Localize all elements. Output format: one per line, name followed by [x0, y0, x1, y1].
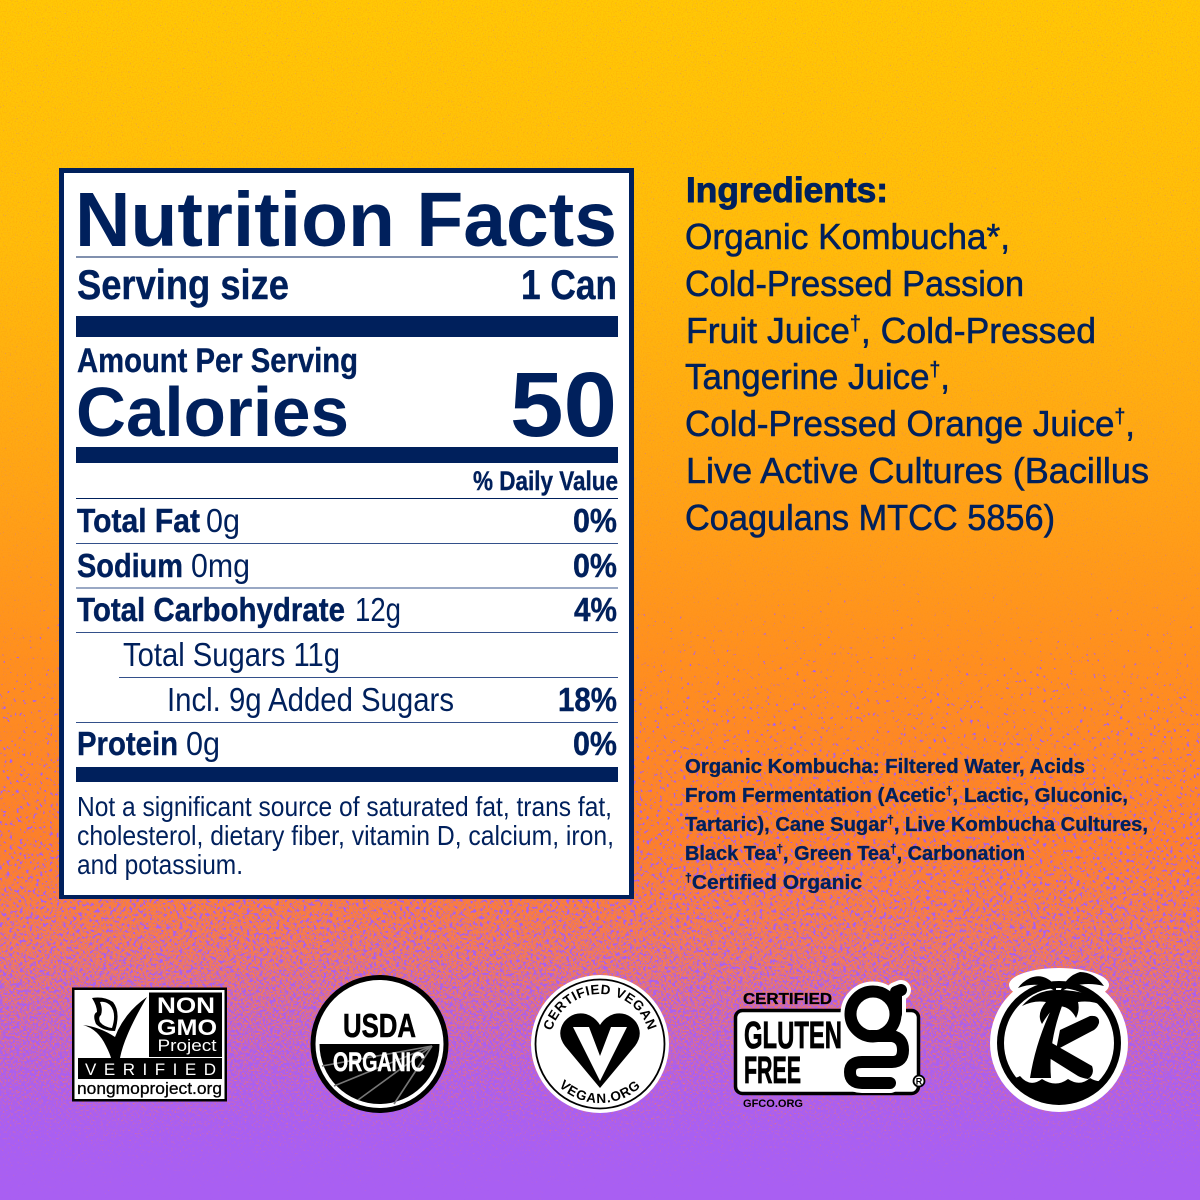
- icon: Certified Vegan: CERTIFIED VEGAN: [544, 984, 657, 1030]
- calories value: 50: [510, 354, 617, 456]
- row: total sugars: Total Sugars 11g: [123, 636, 340, 673]
- icon: Non GMO Project Verified: NON: [157, 993, 215, 1018]
- kombucha sub-ingredients: †: [685, 871, 692, 885]
- icon: Non GMO Project Verified: [72, 988, 227, 1102]
- kombucha sub-ingredients: [685, 755, 1148, 894]
- row: protein: [77, 725, 617, 762]
- row: total fat: 0%: [573, 502, 617, 539]
- row: total fat: 0g: [206, 502, 240, 539]
- ingredients list: Cold-Pressed Passion: [685, 263, 1024, 304]
- kombucha sub-ingredients: , Carbonation: [897, 842, 1025, 865]
- icon: Certified Gluten Free: GFCO.ORG: [743, 1098, 803, 1110]
- ingredients list: Live Active Cultures (Bacillus: [686, 450, 1149, 491]
- amount per serving: Amount Per Serving: [77, 342, 358, 380]
- ingredients list: Cold-Pressed Orange Juice: [685, 403, 1127, 444]
- icon: USDA Organic: [310, 975, 448, 1113]
- heart with V: [560, 1013, 640, 1088]
- row: sodium: Sodium: [77, 547, 183, 584]
- icon: Certified Gluten Free: CERTIFIED: [743, 991, 832, 1008]
- ingredients list: Fruit Juice: [686, 310, 852, 351]
- icon: USDA Organic: ORGANIC: [333, 1047, 425, 1077]
- panel: nutrition facts: [59, 168, 634, 899]
- kombucha sub-ingredients: †: [777, 842, 783, 856]
- kombucha sub-ingredients: Certified Organic: [692, 871, 862, 894]
- kombucha sub-ingredients: From Fermentation (Acetic: [685, 784, 946, 807]
- kombucha sub-ingredients: †: [946, 784, 953, 798]
- icon: Certified Gluten Free: FREE: [744, 1050, 801, 1092]
- icon: Non GMO Project Verified: GMO: [157, 1015, 217, 1040]
- ingredients list: Coagulans MTCC 5856): [685, 497, 1055, 538]
- kombucha sub-ingredients: Organic Kombucha: Filtered Water, Acids: [685, 755, 1085, 778]
- ingredients heading: Ingredients:: [686, 171, 888, 210]
- footnote: Not a significant source of saturated fat, trans fat,: [77, 791, 612, 822]
- kombucha sub-ingredients: , Live Kombucha Cultures,: [894, 813, 1148, 836]
- g mark: [850, 990, 903, 1083]
- icon: palm tree K brand logo: [990, 968, 1128, 1112]
- ingredients list: Organic Kombucha*,: [685, 216, 1010, 257]
- icon: Non GMO Project Verified: nongmoproject.org: [77, 1080, 222, 1098]
- ingredients list: †: [1114, 406, 1125, 428]
- icon: Non GMO Project Verified: VERIFIED: [85, 1060, 216, 1079]
- ingredients list: †: [850, 313, 861, 335]
- row: total carbohydrate: 4%: [574, 591, 617, 628]
- icon: Certified Gluten Free: GLUTEN: [744, 1015, 842, 1057]
- row: sodium: 0mg: [191, 547, 250, 584]
- furrow lines: [322, 1046, 432, 1104]
- row: total fat: Total Fat: [77, 502, 200, 539]
- icon: Certified Vegan: VEGAN.ORG: [561, 1079, 640, 1104]
- row: total carbohydrate: 12g: [355, 591, 401, 628]
- ingredients list: [685, 216, 1149, 538]
- row: protein: Protein: [77, 725, 178, 762]
- row: total carbohydrate: [77, 591, 617, 628]
- calories label: Calories: [76, 373, 349, 451]
- kombucha sub-ingredients: Black Tea: [685, 842, 779, 865]
- icon: Certified Vegan: [531, 975, 669, 1113]
- palm fronds: [1022, 990, 1104, 1024]
- row: protein: 0g: [186, 725, 220, 762]
- row: sodium: 0%: [573, 547, 617, 584]
- ingredients list: Tangerine Juice: [685, 356, 937, 397]
- K lower leg: [1046, 1042, 1093, 1079]
- row: total fat: [77, 502, 617, 539]
- kombucha sub-ingredients: Tartaric), Cane Sugar: [685, 813, 891, 836]
- kombucha sub-ingredients: , Lactic, Gluconic,: [953, 784, 1128, 807]
- ingredients list: †: [930, 359, 940, 381]
- butterfly and sprout mark: [83, 997, 147, 1058]
- serving size value: 1 Can: [521, 261, 617, 308]
- footnote: cholesterol, dietary fiber, vitamin D, calcium, iron,: [77, 820, 614, 851]
- row: added sugars: Incl. 9g Added Sugars: [167, 681, 454, 718]
- daily value header: % Daily Value: [473, 466, 618, 496]
- kombucha sub-ingredients: , Green Tea: [783, 842, 891, 865]
- ingredients list: , Cold-Pressed: [861, 310, 1096, 351]
- palm trunk K stem: [1030, 1004, 1062, 1078]
- icon: Certified Gluten Free: R: [916, 1076, 923, 1086]
- K upper arm: [1056, 1016, 1099, 1050]
- row: total carbohydrate: Total Carbohydrate: [77, 591, 345, 628]
- ingredients list: ,: [1125, 403, 1135, 444]
- icon: USDA Organic: USDA: [343, 1007, 416, 1044]
- row: added sugars: 18%: [558, 681, 617, 718]
- serving size label: Serving size: [77, 261, 289, 308]
- registered mark: [914, 1076, 924, 1086]
- footnote: [77, 791, 614, 880]
- footnote: and potassium.: [77, 849, 243, 880]
- ingredients list: ,: [940, 356, 950, 397]
- ingredients text block: [685, 171, 1149, 538]
- heading: Nutrition Facts: Nutrition Facts: [75, 177, 617, 263]
- icon: Non GMO Project Verified: Project: [158, 1036, 217, 1055]
- g outline: [850, 990, 903, 1083]
- icon: Certified Gluten Free: [736, 990, 924, 1110]
- kombucha sub-ingredients: †: [887, 813, 894, 827]
- row: sodium: [77, 547, 617, 584]
- kombucha sub-ingredients: †: [890, 842, 897, 856]
- row: protein: 0%: [573, 725, 617, 762]
